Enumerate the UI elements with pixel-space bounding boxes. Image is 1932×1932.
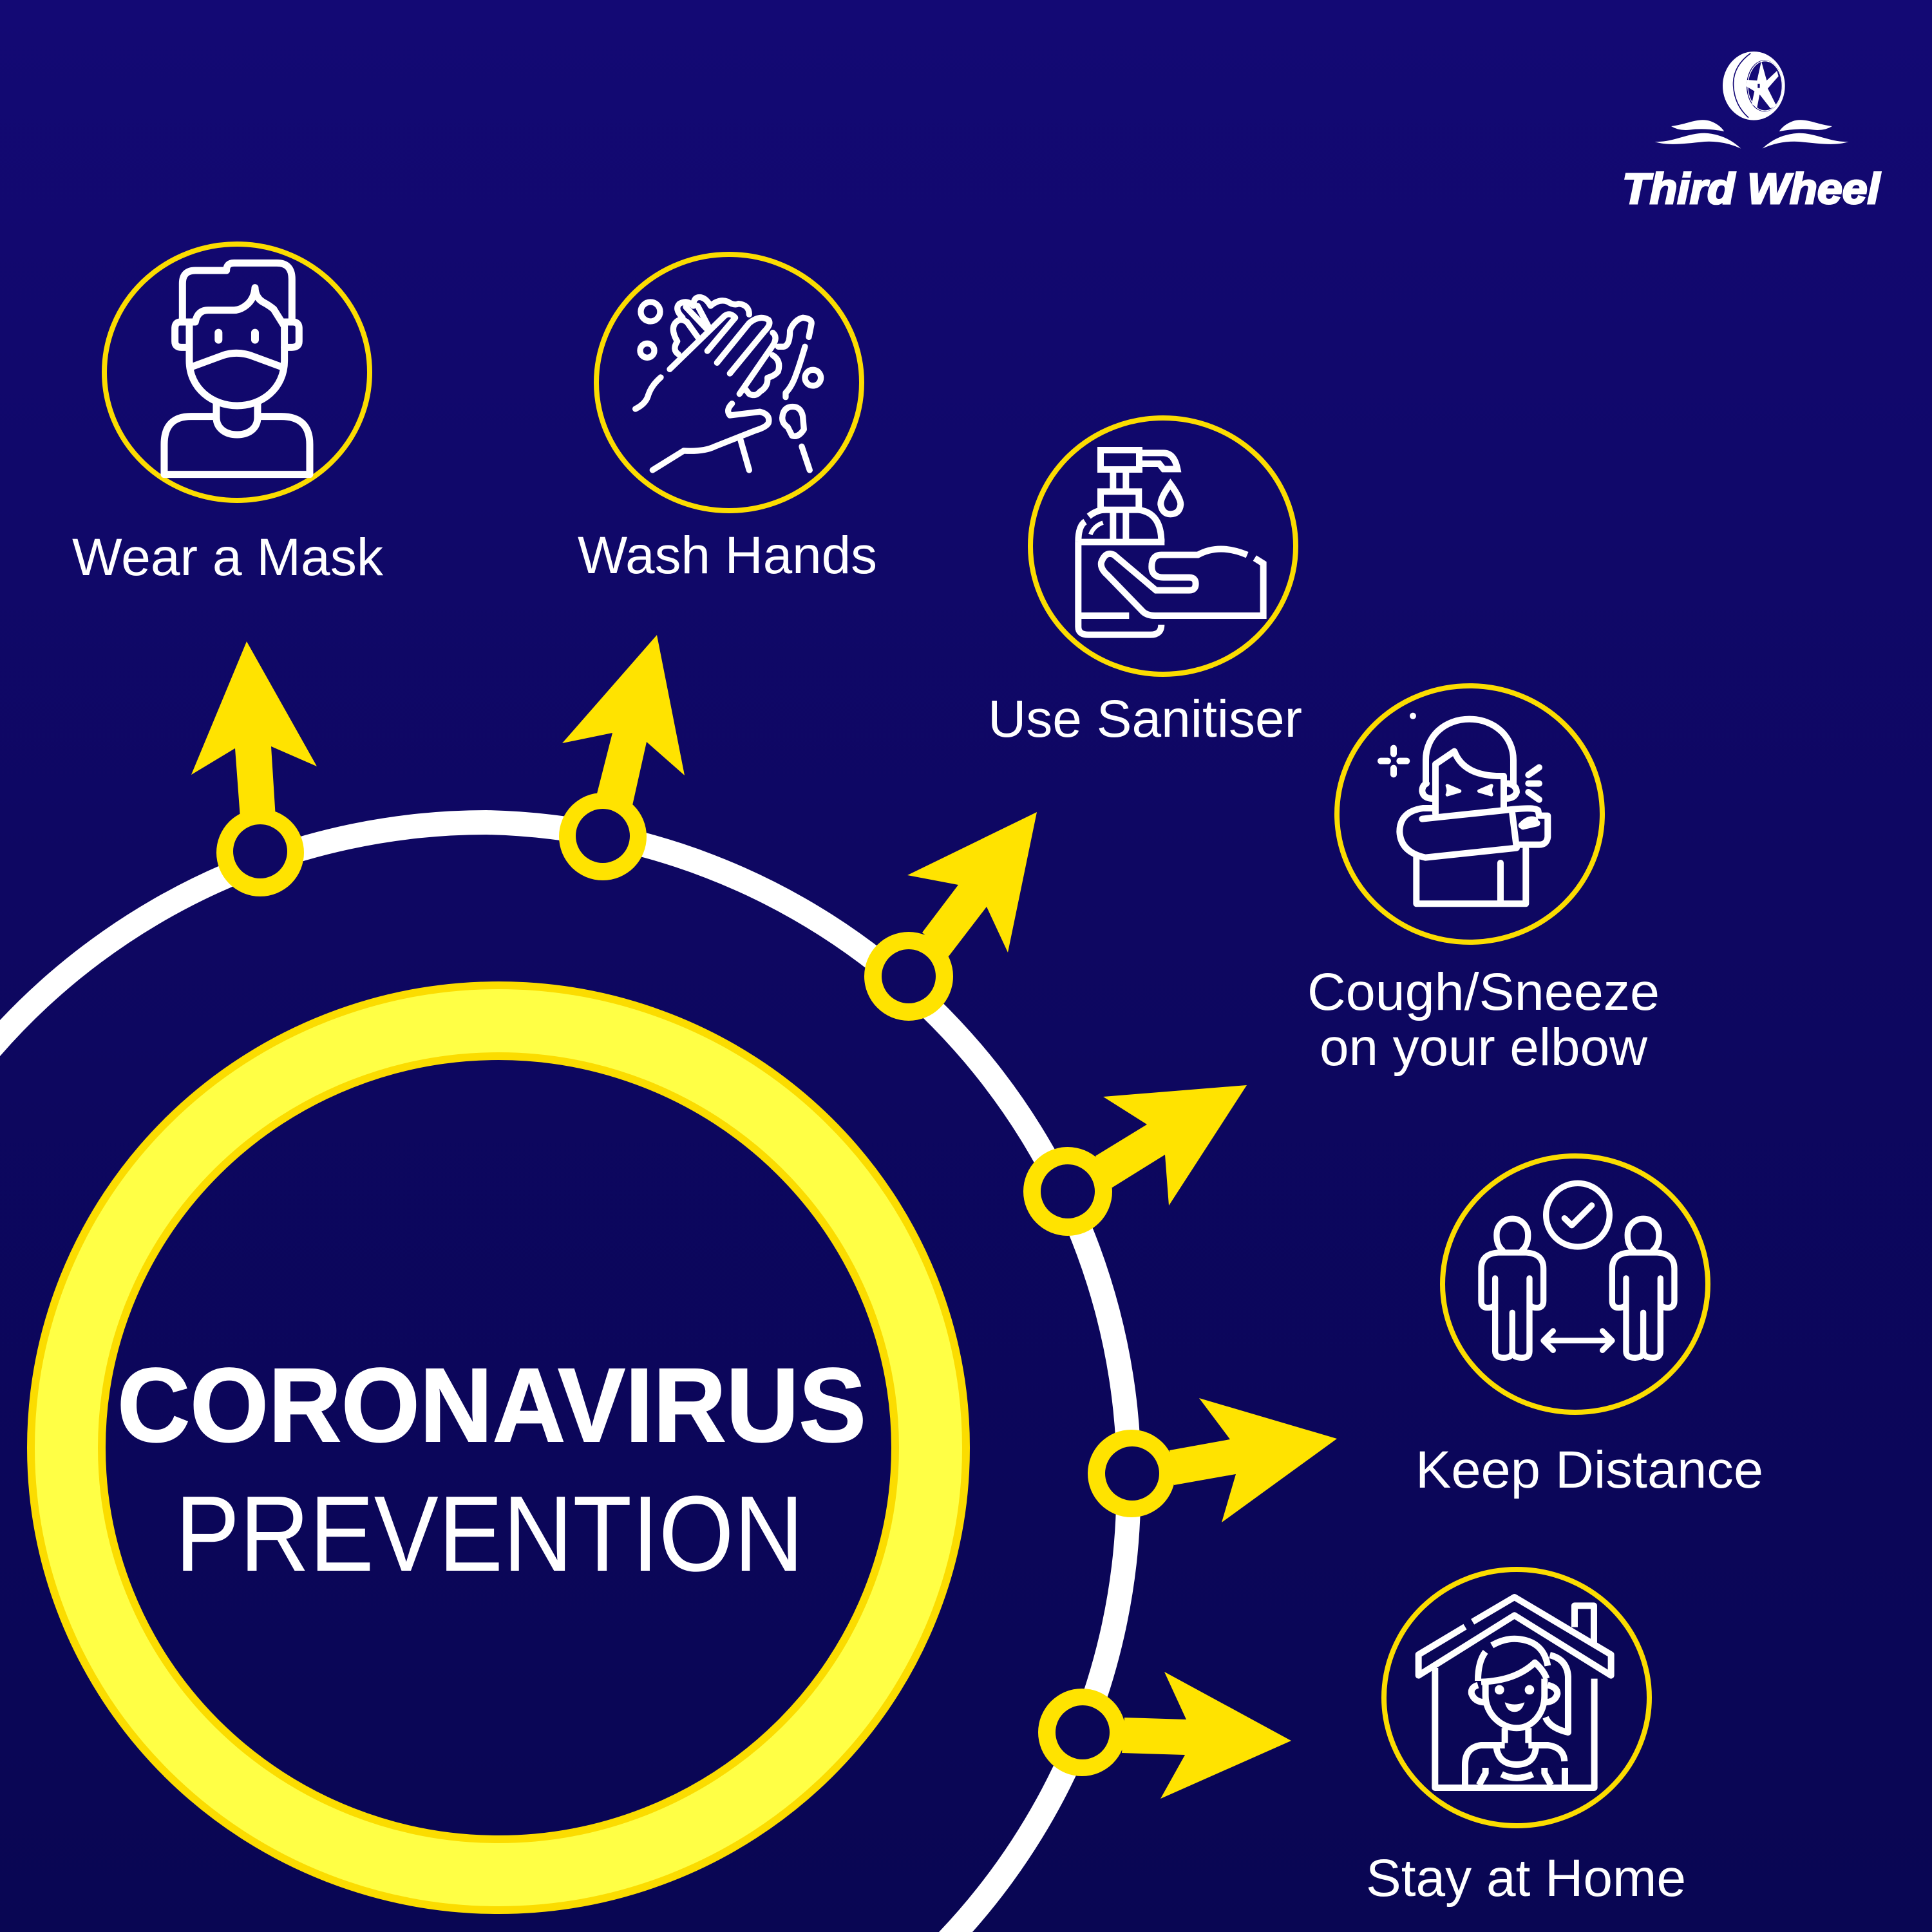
central yellow ring bbox=[66, 1021, 931, 1875]
label: cough or sneeze on your elbow: Cough/Sneeze bbox=[1307, 963, 1660, 1021]
arrow: to keep distance bbox=[1088, 1398, 1337, 1522]
arrow: to cough or sneeze bbox=[1023, 1085, 1247, 1236]
icon: two people keeping distance bbox=[1481, 1183, 1674, 1358]
icon: sanitiser bottle and hand bbox=[1078, 450, 1264, 635]
icon: person wearing mask bbox=[164, 263, 310, 475]
logo: Third Wheel bbox=[1622, 52, 1880, 213]
icon ring: mask bbox=[104, 244, 370, 500]
panel: use sanitiser bbox=[988, 418, 1302, 748]
arrow: to wear a mask bbox=[191, 641, 317, 896]
icon: washing hands bbox=[636, 297, 821, 470]
icon ring: distance bbox=[1443, 1156, 1708, 1412]
label: cough or sneeze on your elbow bbox=[1307, 963, 1660, 1077]
label: cough or sneeze on your elbow: on your elbow bbox=[1320, 1018, 1648, 1077]
title bbox=[117, 1346, 866, 1594]
title line: prevention: PREVENTION bbox=[175, 1474, 804, 1594]
label: stay at home: Stay at Home bbox=[1366, 1849, 1686, 1908]
arrow: to stay at home bbox=[1038, 1672, 1291, 1799]
icon: person coughing into elbow bbox=[1381, 713, 1548, 904]
label: use sanitiser: Use Sanitiser bbox=[988, 690, 1302, 748]
logo wordmark: Third Wheel bbox=[1622, 165, 1880, 213]
icon ring: cough bbox=[1337, 686, 1602, 942]
label: wear a mask: Wear a Mask bbox=[72, 528, 384, 587]
panel: cough or sneeze on your elbow bbox=[1307, 686, 1660, 1077]
icon ring: home bbox=[1384, 1569, 1649, 1826]
white orbit ring bbox=[0, 810, 1141, 1932]
panel: keep distance bbox=[1416, 1156, 1763, 1499]
icon: wheel and wings bbox=[1654, 52, 1849, 149]
panel: stay at home bbox=[1366, 1569, 1686, 1908]
icon ring: hands bbox=[596, 254, 862, 511]
panel: wash hands bbox=[578, 254, 877, 585]
arrow: to wash hands bbox=[559, 635, 685, 880]
arrow: to use sanitiser bbox=[864, 812, 1037, 1021]
title line: coronavirus: CORONAVIRUS bbox=[117, 1346, 866, 1464]
icon ring: sanitiser bbox=[1030, 418, 1296, 674]
label: wash hands: Wash Hands bbox=[578, 526, 877, 585]
panel: wear a mask bbox=[72, 244, 384, 587]
icon: woman inside house bbox=[1419, 1597, 1611, 1788]
label: keep distance: Keep Distance bbox=[1416, 1441, 1763, 1499]
